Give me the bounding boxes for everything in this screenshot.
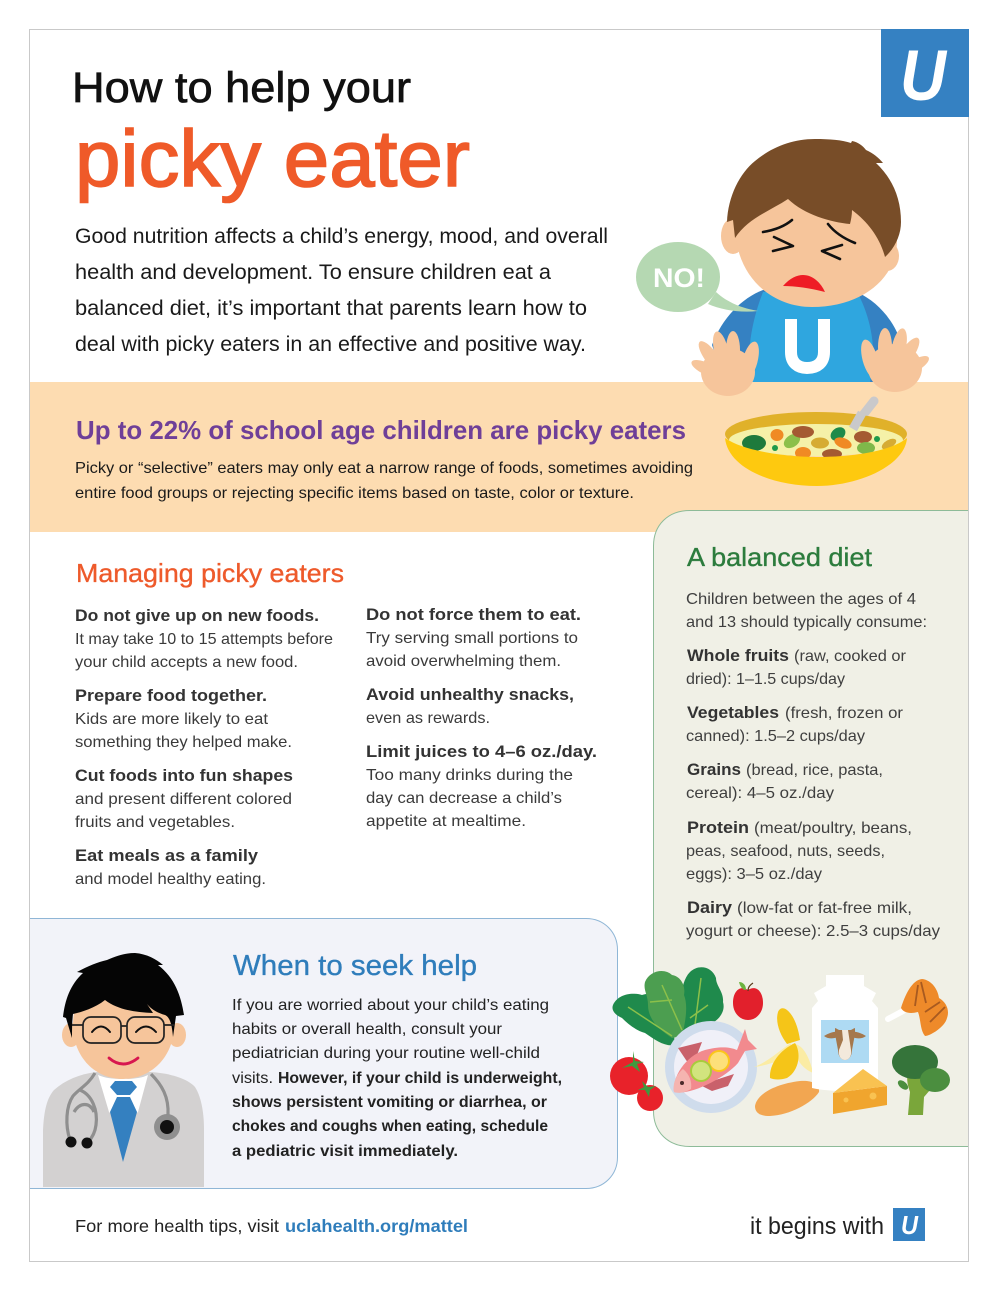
text: when to seek help: a pediatric visit immediately. <box>232 1143 458 1160</box>
footer: more health tips: For more health tips, visit <box>75 1216 279 1236</box>
tip: prepare food <box>75 686 292 751</box>
text: protein: peas, seafood, nuts, seeds, <box>686 843 885 860</box>
lemon slice <box>708 1050 730 1072</box>
text: whole fruits: (raw, cooked or <box>794 648 907 665</box>
footer: more health tips: uclahealth.org/mattel <box>285 1216 468 1236</box>
footer: tagline and logo <box>750 1208 925 1241</box>
title line two: picky eater <box>75 114 470 203</box>
banana <box>754 1008 813 1080</box>
tip: limit juices: appetite at mealtime. <box>366 813 526 830</box>
title line one: How to help your <box>72 64 411 112</box>
text: when to seek help: shows persistent vomiting or diarrhea, or <box>232 1094 547 1111</box>
heading: balanced diet: A balanced diet <box>687 542 873 572</box>
icon: healthy foods <box>610 967 950 1116</box>
footer: tagline and logo: it begins with <box>750 1213 884 1240</box>
intro paragraph <box>75 225 608 356</box>
panel: balanced diet <box>654 510 968 1146</box>
tomatoes <box>610 1051 663 1111</box>
tip: family meals: and model healthy eating. <box>75 871 266 888</box>
text: protein: (meat/poultry, beans, <box>754 820 912 837</box>
tip: new foods: Do not give up on new foods. <box>75 606 319 625</box>
text: whole fruits <box>686 646 907 688</box>
tip: fun shapes: Cut foods into fun shapes <box>75 766 293 785</box>
spoon <box>856 401 874 424</box>
text: vegetables: Vegetables <box>687 703 779 722</box>
tip: new foods <box>75 606 333 671</box>
text: balanced diet intro <box>686 591 927 631</box>
icon: boy refusing food <box>689 139 932 396</box>
text: when to seek help: visits. <box>232 1070 273 1087</box>
lab coat <box>43 1072 204 1187</box>
apple <box>733 982 763 1020</box>
cow label <box>821 1020 869 1063</box>
bread <box>755 1081 819 1116</box>
plate with fish <box>665 1021 757 1113</box>
text: whole fruits: Whole fruits <box>687 646 789 665</box>
cow <box>824 1028 866 1060</box>
text: balanced diet intro: Children between the ages of 4 <box>686 591 916 608</box>
tip: fun shapes: and present different colored <box>75 791 292 808</box>
heading: when to seek help: When to seek help <box>233 950 477 982</box>
icon: bowl of food <box>725 401 907 486</box>
tip: new foods: It may take 10 to 15 attempts before <box>75 631 333 648</box>
chicken <box>888 979 948 1036</box>
intro paragraph: health and development. To ensure children eat a <box>75 261 551 284</box>
broccoli <box>892 1045 950 1115</box>
heading: managing picky eaters: Managing picky eaters <box>76 558 344 588</box>
text: vegetables: (fresh, frozen or <box>785 705 904 722</box>
tip: limit juices: day can decrease a child’s <box>366 790 562 807</box>
intro paragraph: balanced diet, it’s important that parents learn how to <box>75 297 587 320</box>
text: grains: Grains <box>687 760 741 779</box>
text: when to seek help: However, if your child is underweight, <box>278 1070 562 1087</box>
brows and eyes <box>763 220 855 259</box>
text: grains: cereal): 4–5 oz./day <box>686 785 834 802</box>
tip: limit juices <box>366 742 597 830</box>
footer: more health tips <box>75 1216 468 1236</box>
ears <box>721 218 899 271</box>
text: protein <box>686 818 912 883</box>
tip: limit juices: Limit juices to 4–6 oz./day. <box>366 742 597 761</box>
statistic text: entire food groups or rejecting specific items based on taste, color or texture. <box>75 485 634 502</box>
logo: U square: U <box>900 37 948 116</box>
statistic heading: Up to 22% of school age children are picky eaters <box>76 415 686 445</box>
right leaf <box>680 967 724 1040</box>
eyes <box>92 1026 156 1032</box>
tips: right column <box>366 605 597 830</box>
text: vegetables <box>686 703 904 745</box>
hair <box>727 139 901 257</box>
tip: fun shapes <box>75 766 293 831</box>
tip: family meals: Eat meals as a family <box>75 846 259 865</box>
text: when to seek help: habits or overall health, consult your <box>232 1021 503 1038</box>
tip: family meals <box>75 846 266 888</box>
tip: prepare food: Prepare food together. <box>75 686 267 705</box>
soup <box>729 424 903 456</box>
text: when to seek help: chokes and coughs when eating, schedule <box>232 1118 548 1135</box>
tip: unhealthy snacks <box>366 685 574 727</box>
tip: fun shapes: fruits and vegetables. <box>75 814 235 831</box>
text: balanced diet intro: and 13 should typically consume: <box>686 614 927 631</box>
tip: do not force: avoid overwhelming them. <box>366 653 561 670</box>
statistic text <box>75 460 693 502</box>
tips: left column <box>75 606 333 888</box>
tip: prepare food: something they helped make. <box>75 734 292 751</box>
ears <box>62 1023 186 1047</box>
panel: when to seek help <box>30 918 618 1188</box>
collar <box>98 1075 148 1124</box>
speech bubble: NO!: NO! <box>653 263 705 293</box>
intro paragraph: deal with picky eaters in an effective and positive way. <box>75 333 586 356</box>
shirt front <box>749 292 873 382</box>
middle leaf <box>645 971 686 1038</box>
text: vegetables: canned): 1.5–2 cups/day <box>686 728 865 745</box>
stethoscope <box>67 1073 168 1142</box>
shirt sleeves <box>712 290 902 382</box>
statistic text: Picky or “selective” eaters may only eat a narrow range of foods, sometimes avoiding <box>75 460 693 477</box>
text: when to seek help: If you are worried about your child’s eating <box>232 997 549 1014</box>
face <box>73 975 174 1079</box>
text: protein: Protein <box>687 818 749 837</box>
text: dairy: yogurt or cheese): 2.5–3 cups/day <box>686 923 940 940</box>
food pieces <box>742 424 898 459</box>
cheese <box>833 1069 887 1114</box>
tip: do not force: Try serving small portions to <box>366 630 578 647</box>
glasses <box>72 1017 174 1043</box>
intro paragraph: Good nutrition affects a child’s energy, mood, and overall <box>75 225 608 248</box>
bowl body <box>725 438 907 486</box>
left hand <box>689 330 762 396</box>
tip: prepare food: Kids are more likely to eat <box>75 711 269 728</box>
text: grains <box>686 760 883 802</box>
tip: do not force: Do not force them to eat. <box>366 605 581 624</box>
tip: unhealthy snacks: even as rewards. <box>366 710 490 727</box>
shirt U <box>791 319 824 368</box>
tip: limit juices: Too many drinks during the <box>366 767 573 784</box>
text: dairy <box>686 898 940 940</box>
smile <box>109 1058 138 1064</box>
bowl rim <box>725 412 907 456</box>
footer: tagline and logo: U <box>901 1210 919 1240</box>
text: grains: (bread, rice, pasta, <box>746 762 883 779</box>
tip: new foods: your child accepts a new food. <box>75 654 298 671</box>
text: when to seek help: pediatrician during your routine well-child <box>232 1045 540 1062</box>
text: when to seek help <box>232 997 562 1160</box>
lime slice <box>690 1060 712 1082</box>
hair <box>63 953 184 1038</box>
panel: statistic band <box>30 382 968 532</box>
tie <box>110 1081 137 1162</box>
right hand <box>858 327 932 392</box>
left leaf <box>612 994 675 1045</box>
logo: U square <box>881 29 969 117</box>
text: dairy: Dairy <box>687 898 733 917</box>
speech bubble: NO! <box>636 242 758 312</box>
text: whole fruits: dried): 1–1.5 cups/day <box>686 671 845 688</box>
lettuce <box>612 967 724 1045</box>
tip: do not force <box>366 605 581 670</box>
milk bottle <box>812 975 878 1091</box>
tip: unhealthy snacks: Avoid unhealthy snacks, <box>366 685 574 704</box>
text: dairy: (low-fat or fat-free milk, <box>737 900 912 917</box>
mouth <box>783 275 825 292</box>
icon: doctor <box>43 953 204 1187</box>
text: protein: eggs): 3–5 oz./day <box>686 866 822 883</box>
title <box>72 64 470 203</box>
face <box>735 165 897 307</box>
